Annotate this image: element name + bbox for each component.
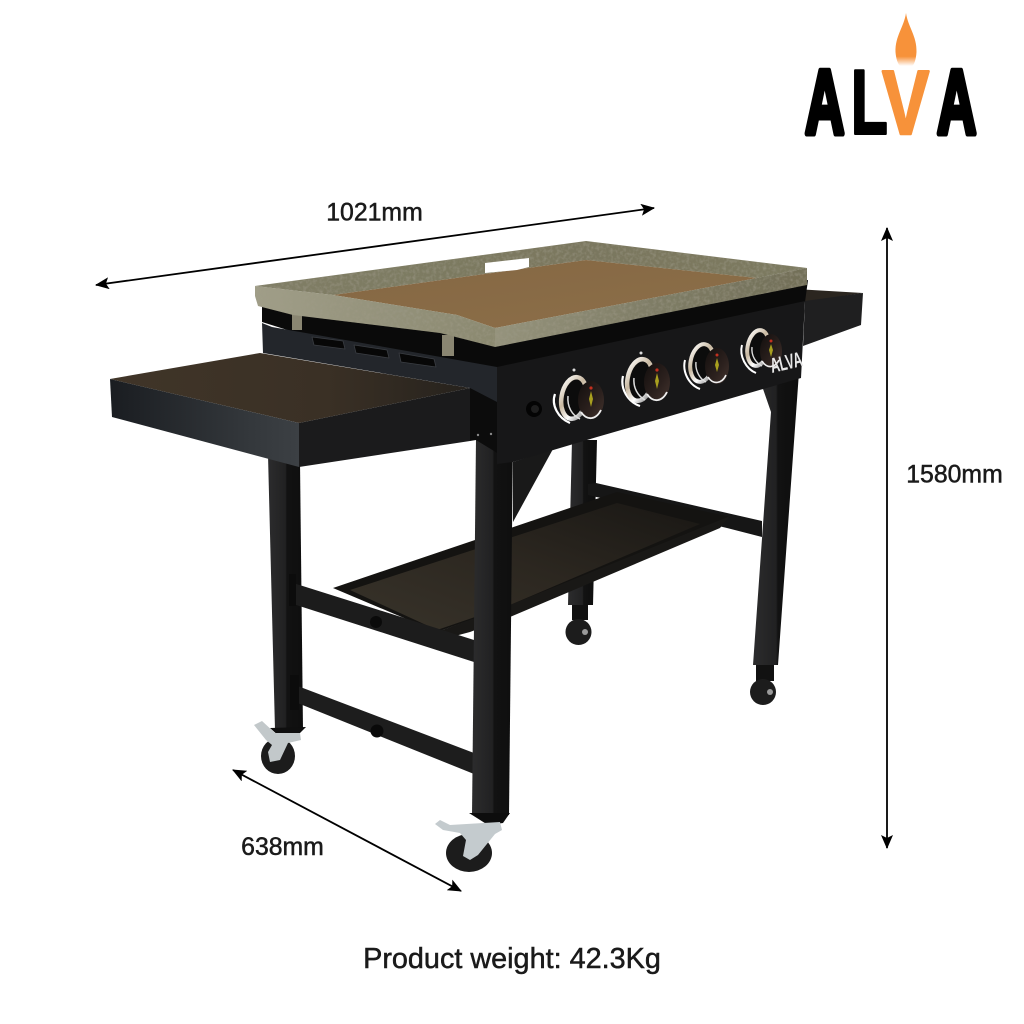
logo wordmark: L: [851, 52, 888, 154]
rear left leg: [268, 455, 303, 730]
griddle handle cutout: [485, 258, 529, 273]
logo wordmark: A: [937, 51, 976, 153]
left rear caster: [254, 721, 306, 774]
right side shelf: [765, 288, 863, 346]
dark cavity under griddle: [262, 280, 808, 388]
left front caster: [435, 813, 510, 872]
burner knob 3: [684, 342, 729, 389]
burner knob 4: [741, 328, 782, 373]
griddle front lip: [255, 286, 495, 347]
igniter button: [526, 401, 542, 417]
griddle plate: [255, 241, 807, 347]
gusset: [513, 449, 553, 522]
shelf bracket: [470, 375, 512, 462]
burner front panel: [497, 301, 805, 464]
dimension: width arrow: [96, 208, 654, 285]
icon: flame: [895, 13, 917, 66]
griddle cooking surface: [333, 260, 757, 328]
right side brace: [588, 483, 762, 537]
griddle cart product: [110, 241, 863, 872]
dimension label: width: 1021mm: [326, 200, 423, 226]
panel logo: ALVA: [768, 347, 805, 378]
left side shelf: [110, 353, 470, 467]
burner knob 2: [622, 352, 670, 406]
logo wordmark: A: [805, 51, 844, 153]
dimension: height arrow: [886, 228, 888, 848]
lower cross brace: [290, 675, 474, 774]
rear right leg and caster: [566, 440, 597, 645]
product weight caption: Product weight: 42.3Kg: [363, 943, 661, 975]
logo wordmark: V: [882, 53, 929, 154]
burner knob 1: [554, 368, 604, 423]
front right leg and caster: [750, 372, 799, 705]
dimension label: depth: 638mm: [241, 834, 324, 861]
griddle rear rail: [262, 323, 497, 402]
front left leg: [472, 438, 513, 815]
upper cross brace: [289, 574, 474, 662]
griddle right lip: [495, 268, 807, 347]
lower shelf: [333, 492, 730, 636]
griddle back wall: [255, 241, 807, 295]
rail slots: [312, 337, 436, 367]
dimension label: height: 1580mm: [906, 462, 1003, 488]
logo: ALVA: [805, 13, 976, 154]
dimension: depth arrow: [233, 770, 461, 891]
logo wordmark: [805, 51, 976, 154]
griddle support posts: [292, 312, 454, 356]
